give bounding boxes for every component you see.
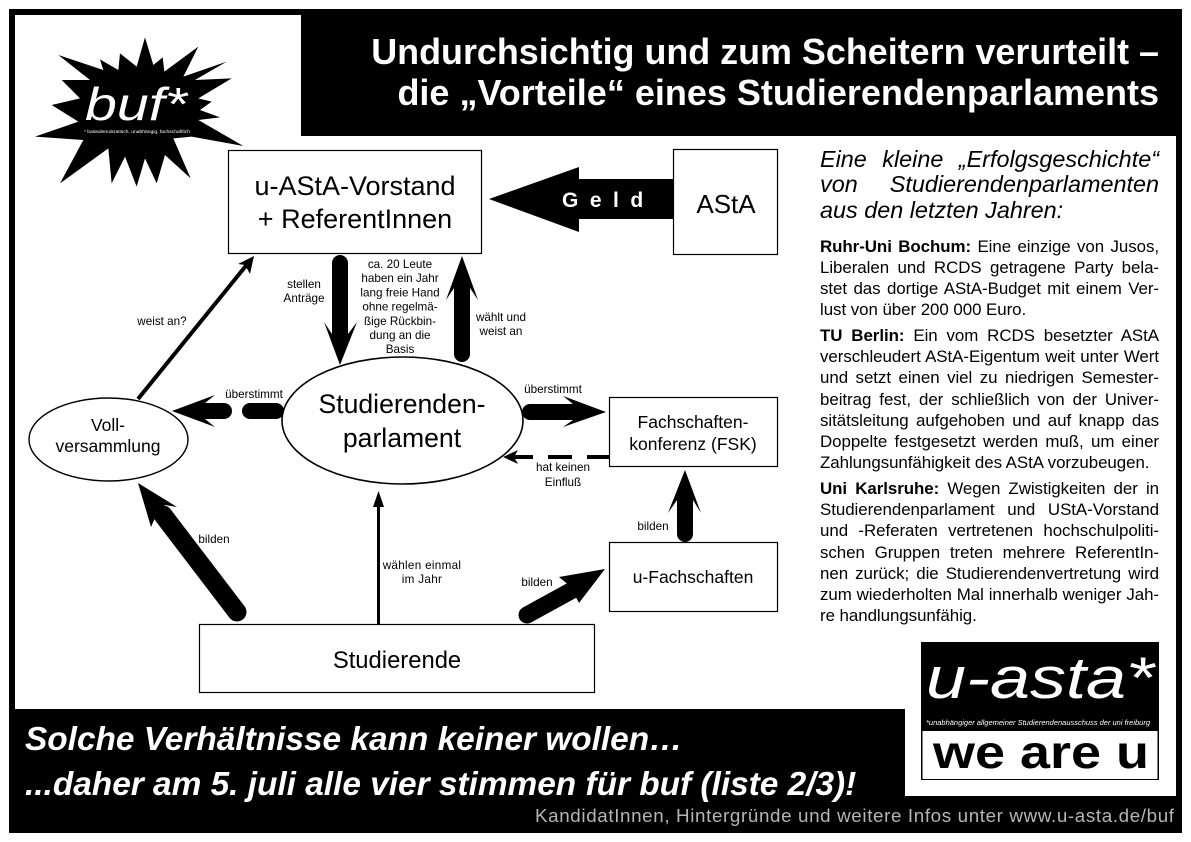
paragraph: TU Berlin: TU Berlin: Ein vom RCDS besetzter AStA: [820, 326, 1159, 345]
label: stellen Anträge: Anträge: [284, 292, 324, 305]
label: wählt und weist an: weist an: [479, 325, 522, 338]
arrow: bilden to Vollversammlung: [138, 483, 237, 612]
side heading: aus den letzten Jahren:: [820, 196, 1063, 222]
bottom call to action: [25, 721, 856, 803]
arrow: Geld: Geld: [562, 189, 655, 212]
paragraph: Uni Karlsruhe: re handlungsunfähig.: [820, 606, 977, 625]
box: Studierende: Studierende: [333, 647, 461, 674]
paragraph: Uni Karlsruhe: nen zurück; die Studierendenvertretung wird: [820, 564, 1159, 583]
ellipse: Vollversammlung: Voll-: [91, 415, 125, 435]
buf logo: * basisdemokratisch, unabhängig, fachschaftlich: [84, 129, 190, 134]
label: wählen einmal im Jahr: im Jahr: [402, 573, 442, 586]
arrow: wählt und weist an: [446, 256, 478, 354]
side heading: von Studierendenparlamenten: [820, 171, 1159, 197]
box: Fachschaftenkonferenz: Fachschaften-: [638, 412, 749, 432]
box: AStA: AStA: [696, 189, 756, 219]
title banner: [301, 15, 1176, 136]
paragraph: Ruhr-Uni Bochum: Ruhr-Uni Bochum: Eine einzige von Jusos,: [820, 236, 1159, 256]
buf logo: buf*: [85, 78, 190, 130]
paragraph: TU Berlin: und setzt einen viel zu niedrigen Semester-: [820, 368, 1159, 387]
paragraph: Uni Karlsruhe: [820, 479, 1159, 625]
paragraph: TU Berlin: beitrag fest, der schließlich von der Univer-: [820, 390, 1159, 409]
label: wählt und weist an: wählt und: [476, 311, 526, 324]
side heading: Eine kleine „Erfolgsgeschichte“: [820, 146, 1159, 172]
u-asta logo: [921, 642, 1159, 780]
paragraph: TU Berlin: verschleudert AStA-Eigentum weit unter Wert: [820, 347, 1159, 366]
paragraph: Uni Karlsruhe: und -Referaten vertretenen hochschulpoliti-: [820, 521, 1159, 540]
u-asta logo: *unabhängiger allgemeiner Studierendenausschuss der uni freiburg: [926, 720, 1150, 727]
ellipse: Vollversammlung: versammlung: [55, 436, 161, 456]
paragraph: TU Berlin: Doppelte festgesetzt werden muß, um einer: [820, 432, 1159, 451]
footer link: KandidatInnen, Hintergründe und weitere Infos unter www.u-asta.de/buf: [535, 805, 1175, 826]
u-asta logo: u-asta*: [926, 646, 1157, 711]
label: bilden u-Fachschaften: bilden: [521, 576, 553, 589]
label: hat keinen Einfluß: Einfluß: [545, 476, 581, 489]
label: ca. 20 Leute: lang freie Hand: [360, 286, 440, 299]
label: wählen einmal im Jahr: wählen einmal: [383, 559, 461, 572]
paragraph: Uni Karlsruhe: zum wiederholten Mal innerhalb weniger Jah-: [820, 585, 1159, 604]
box: Fachschaftenkonferenz: konferenz (FSK): [629, 434, 757, 454]
label: überstimmt left: überstimmt: [225, 388, 284, 401]
label: weist an: weist an?: [136, 315, 187, 328]
paragraph: Uni Karlsruhe: Studierendenparlament und UStA-Vorstand: [820, 500, 1159, 519]
paragraph: TU Berlin: sitätsleitung aufgehoben und auf knapp das: [820, 411, 1159, 430]
bottom call to action: Solche Verhältnisse kann keiner wollen…: [25, 721, 683, 758]
arrow: weist an: [138, 256, 254, 399]
arrow: bilden to u-Fachschaften: [527, 569, 605, 615]
paragraph: Uni Karlsruhe: schen Gruppen treten mehrere ReferentIn-: [820, 543, 1159, 562]
label: bilden FSK: bilden: [637, 520, 669, 533]
buf logo: [35, 37, 243, 187]
side heading: [820, 146, 1160, 222]
arrow: bilden to FSK: [668, 470, 701, 534]
paragraph: Ruhr-Uni Bochum: stet das dortige AStA-Budget mit einem Ver-: [820, 279, 1159, 298]
label: ca. 20 Leute: haben ein Jahr: [361, 272, 439, 285]
box: u-Fachschaften: u-Fachschaften: [633, 567, 753, 587]
paragraph: Ruhr-Uni Bochum: lust von über 200 000 Euro.: [820, 300, 1026, 319]
ellipse: Studierendenparlament: Studierenden-: [318, 389, 486, 419]
paragraph: Ruhr-Uni Bochum: [820, 236, 1159, 319]
box: Fachschaftenkonferenz: [610, 398, 778, 466]
ellipse: Studierendenparlament: [282, 357, 523, 484]
label: ca. 20 Leute: ßige Rückbin-: [364, 315, 436, 328]
box: Studierende: [200, 624, 594, 692]
label: ca. 20 Leute: ca. 20 Leute: [368, 258, 432, 271]
ellipse: Studierendenparlament: parlament: [343, 423, 462, 453]
label: hat keinen Einfluß: hat keinen: [536, 461, 590, 474]
arrow: stellen Anträge: [324, 263, 357, 365]
label: überstimmt right: überstimmt: [524, 383, 583, 396]
u-asta logo: we are u: [932, 726, 1149, 778]
paragraph: Ruhr-Uni Bochum: Liberalen und RCDS getragene Party bela-: [820, 258, 1159, 277]
box: u-Fachschaften: [610, 542, 778, 612]
paragraph: Uni Karlsruhe: Uni Karlsruhe: Wegen Zwistigkeiten der in: [820, 479, 1159, 498]
title banner: die „Vorteile“ eines Studierendenparlaments: [397, 72, 1159, 113]
box: u-AStA-Vorstand: + ReferentInnen: [258, 204, 452, 234]
dashed arrow: hat keinen Einfluß: [503, 450, 609, 464]
box: AStA: [674, 150, 778, 254]
box: u-AStA-Vorstand: u-AStA-Vorstand: [254, 171, 456, 201]
paragraph: TU Berlin: Zahlungsunfähigkeit des AStA vorzubeugen.: [820, 453, 1149, 472]
label: ca. 20 Leute: ohne regelmä-: [362, 301, 438, 314]
title banner: Undurchsichtig und zum Scheitern verurteilt –: [371, 32, 1159, 72]
label: ca. 20 Leute: dung an die: [369, 329, 431, 342]
arrow: wählen einmal im Jahr: [373, 491, 384, 624]
label: ca. 20 Leute: Basis: [386, 343, 414, 356]
box: u-AStA-Vorstand: [228, 150, 482, 254]
bottom call to action: ...daher am 5. juli alle vier stimmen für buf (liste 2/3)!: [25, 766, 856, 803]
ellipse: Vollversammlung: [29, 398, 188, 481]
arrow: überstimmt to FSK: [530, 396, 606, 427]
arrow: Geld: [489, 167, 673, 232]
dashed arrow: überstimmt to Vollversammlung: [172, 395, 276, 427]
label: stellen Anträge: stellen: [287, 278, 321, 291]
label: bilden Vollversammlung: bilden: [198, 533, 230, 546]
paragraph: TU Berlin: [820, 326, 1159, 472]
